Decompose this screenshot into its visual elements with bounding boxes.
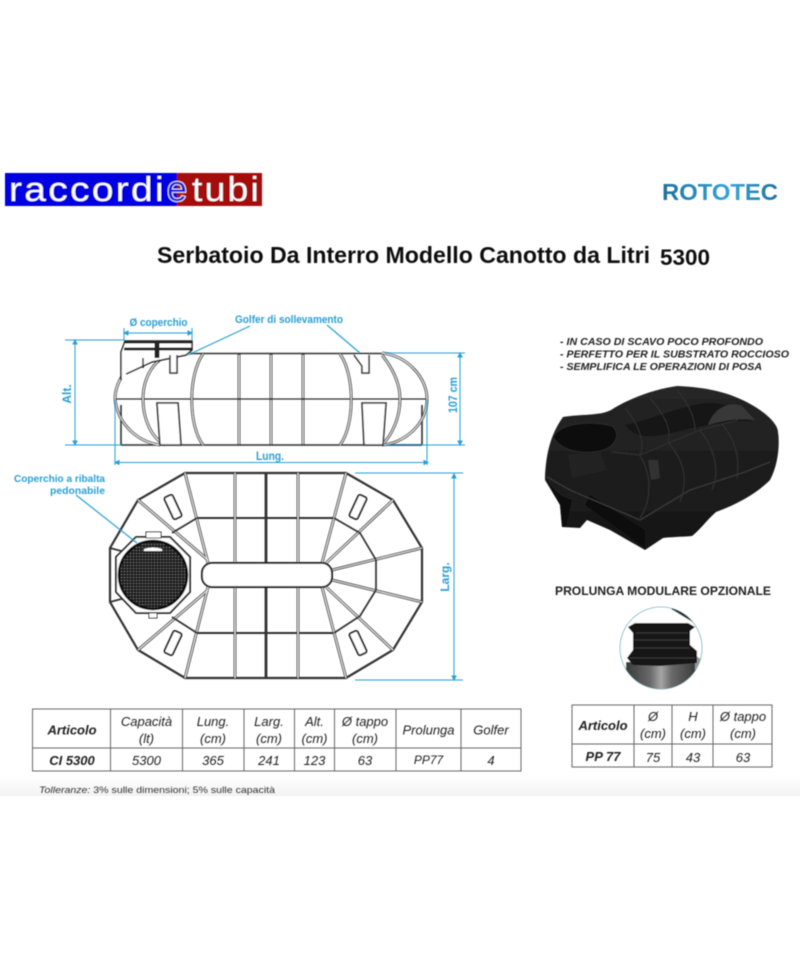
extension table: 43 xyxy=(686,750,701,765)
dimension labels: side view: Golfer di sollevamento xyxy=(235,314,343,326)
turret opening xyxy=(553,423,617,452)
tank photo xyxy=(545,386,779,550)
turret with cover xyxy=(121,341,192,380)
side view dimensions xyxy=(65,325,465,465)
dimension labels: top view xyxy=(14,473,452,592)
dimension labels: side view: Ø coperchio xyxy=(130,317,188,329)
extension table: 75 xyxy=(646,750,661,765)
tank plan outline xyxy=(110,473,422,678)
product table: Ø tappo xyxy=(341,714,388,729)
product table: 365 xyxy=(202,753,225,768)
product table: CI 5300 xyxy=(49,753,96,768)
product table: Lung. xyxy=(197,714,229,729)
feature list: - PERFETTO PER IL SUBSTRATO ROCCIOSO xyxy=(560,348,789,360)
logo: raccordi e tubi: raccordi xyxy=(9,171,166,209)
product table: (cm) xyxy=(200,731,226,746)
lifting eyes xyxy=(170,355,369,373)
product table: 241 xyxy=(257,753,280,768)
product table xyxy=(32,709,521,771)
extension table: Ø xyxy=(647,709,659,724)
product table: 5300 xyxy=(132,753,162,768)
extension photo xyxy=(620,607,702,692)
dimension labels: side view: Alt. xyxy=(60,384,74,404)
plan ribs xyxy=(138,473,422,678)
extension table: (cm) xyxy=(640,726,666,741)
tolerances note: Tolleranze: 3% sulle dimensioni; 5% sulle capacità xyxy=(39,785,276,796)
feature list xyxy=(560,336,789,373)
logo: raccordi e tubi xyxy=(5,168,262,209)
logo: Rototec: ROTOTEC xyxy=(662,179,778,205)
product table: Alt. xyxy=(304,714,324,729)
logo: raccordi e tubi: tubi xyxy=(192,171,261,209)
product table: Larg. xyxy=(254,714,284,729)
top view drawing xyxy=(110,473,422,678)
footer shading band xyxy=(0,776,800,796)
product table: (cm) xyxy=(352,731,378,746)
extension table: PP 77 xyxy=(586,749,621,764)
product table: Golfer xyxy=(473,722,509,738)
product table: (lt) xyxy=(139,731,154,746)
title: Serbatoio Da Interro Modello Canotto da Litri xyxy=(157,242,650,268)
product table: 123 xyxy=(304,753,326,768)
dimension labels: side view: 107 cm xyxy=(446,377,460,413)
title: 5300 xyxy=(660,245,710,270)
ribs xyxy=(115,353,427,445)
manhole cover xyxy=(116,532,190,618)
product table: PP77 xyxy=(414,753,445,767)
extension table: (cm) xyxy=(730,726,756,741)
dimension labels: top view: Coperchio a ribalta xyxy=(14,473,105,485)
tank side outline xyxy=(115,354,427,445)
lifting eye pockets xyxy=(164,494,367,656)
extension table xyxy=(572,705,772,767)
top view dimensions xyxy=(76,473,463,680)
extension table: Ø tappo xyxy=(719,709,766,724)
feature list: - IN CASO DI SCAVO POCO PROFONDO xyxy=(560,336,763,348)
extension table: 63 xyxy=(736,750,751,765)
dimension labels: top view: pedonabile xyxy=(50,485,105,497)
feature list: - SEMPLIFICA LE OPERAZIONI DI POSA xyxy=(560,361,762,373)
dimension labels: top view: Larg. xyxy=(438,562,452,592)
modular extension heading: PROLUNGA MODULARE OPZIONALE xyxy=(555,584,771,598)
feet xyxy=(157,403,386,445)
side view drawing xyxy=(115,341,427,445)
product table: Prolunga xyxy=(402,722,455,738)
dimension labels: side view: Lung. xyxy=(256,449,284,463)
central slot xyxy=(202,563,332,587)
logo: raccordi e tubi: e xyxy=(167,168,187,209)
product table: (cm) xyxy=(256,731,282,746)
product table: (cm) xyxy=(302,731,328,746)
extension table: Articolo xyxy=(577,718,628,733)
product table: 63 xyxy=(358,753,373,768)
product table: Articolo xyxy=(46,722,97,738)
extension table: (cm) xyxy=(680,726,706,741)
central hollow xyxy=(625,403,752,436)
product table: Capacità xyxy=(121,714,172,729)
dimension labels: side view xyxy=(60,314,460,463)
extension table: H xyxy=(688,709,698,724)
product table: 4 xyxy=(487,753,495,768)
